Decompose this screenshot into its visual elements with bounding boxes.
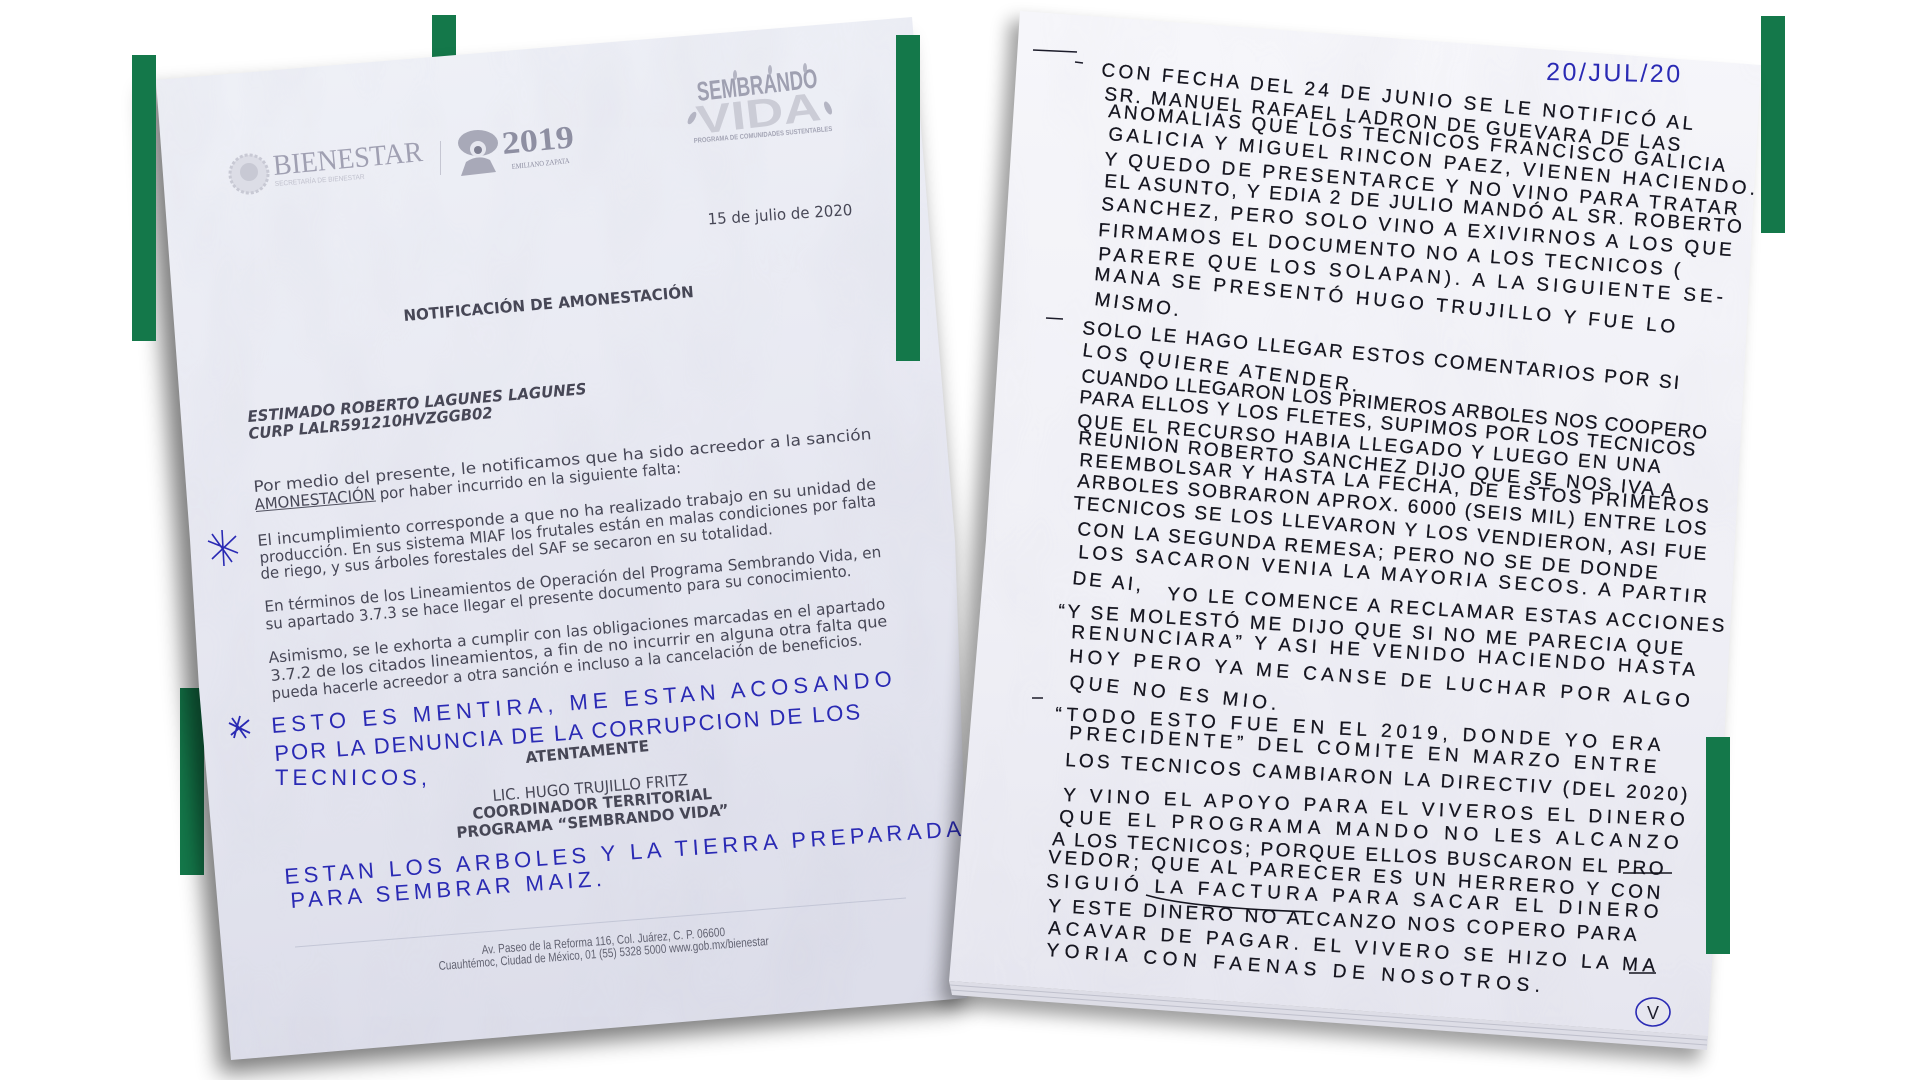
sheet paper: left	[156, 17, 967, 1060]
handwritten paragraph: notification: Y QUEDO DE PRESENTARCE Y NO VINO PARA TRATAR	[1104, 149, 1738, 220]
green bar: lower right over letter	[1706, 737, 1730, 954]
handwritten paragraph: notification: CON FECHA DEL 24 DE JUNIO SE LE NOTIFICÓ AL	[1101, 59, 1694, 135]
addressee	[247, 380, 587, 443]
handwritten paragraph: trees and money: RENUNCIARA” Y ASI HE VENIDO HACIENDO HASTA	[1071, 622, 1696, 681]
handwritten paragraph: nursery: Y VINO EL APOYO PARA EL VIVEROS EL DINERO	[1063, 785, 1685, 831]
handwritten paragraph: notification: GALICIA Y MIGUEL RINCON PAEZ, VIENEN HACIENDO.	[1108, 124, 1756, 200]
handwritten paragraph: notification: ANOMALIAS QUE LOS TECNICOS FRANCISCO GALICIA	[1108, 101, 1726, 177]
handwritten paragraph: nursery: VEDOR; QUE AL PARECER ES UN HERRERO Y CON	[1048, 847, 1661, 904]
logo: Sembrando Vida: VIDA	[694, 85, 823, 143]
handwritten paragraph: trees and money: “Y SE MOLESTÓ ME DIJO QUE SI NO ME PARECIA QUE	[1058, 600, 1684, 660]
logo: Sembrando Vida	[686, 63, 834, 145]
signature block: COORDINADOR TERRITORIAL	[472, 785, 713, 823]
signature block	[456, 737, 729, 842]
signature block: ATENTAMENTE	[525, 737, 650, 767]
text block: exhortation: Asimismo, se le exhorta a cumplir con las obligaciones marcadas en el apartado	[268, 595, 886, 667]
icon: circled initial: V	[1647, 1003, 1659, 1023]
handwritten paragraph: nursery: Y ESTE DINERO NO ALCANZO NOS COPERO PARA	[1048, 896, 1637, 946]
handwritten paragraph: notification: SANCHEZ, PERO SOLO VINO A EXIVIRNOS A LOS QUE	[1101, 194, 1732, 261]
handwritten paragraph: nursery: QUE EL PROGRAMA MANDO NO LES ALCANZO	[1059, 807, 1679, 854]
logo: Sembrando Vida: SEMBRANDO	[695, 63, 819, 107]
icon: handwritten asterisk beside offence	[208, 530, 238, 566]
handwritten note: accusation: ESTO ES MENTIRA, ME ESTAN ACOSANDO	[270, 666, 893, 738]
green bar: upper centre over left sheet	[896, 35, 920, 361]
paper texture: right	[940, 5, 1770, 1045]
date: handwritten: 20/JUL/20	[1546, 58, 1680, 88]
handwritten paragraph: trees and money: CON LA SEGUNDA REMESA; PERO NO SE DE DONDE	[1077, 519, 1659, 584]
logo: Bienestar: BIENESTAR	[272, 136, 425, 182]
text block: exhortation: 3.7.2 de los citados lineamientos, a fin de no incurrir en alguna otra falta que	[270, 612, 888, 685]
footer: address: Cuauhtémoc, Ciudad de México, 01 (55) 5328 5000 www.gob.mx/bienestar	[438, 934, 769, 973]
handwritten paragraph: trees and money: REEMBOLSAR Y HASTA LA FECHA, DE ESTOS PRIMEROS	[1079, 450, 1709, 518]
handwritten paragraph: trees and money: TECNICOS SE LOS LLEVARON Y LOS VENDIERON, ASI FUE	[1073, 493, 1707, 565]
handwritten paragraph: notification	[1093, 59, 1756, 338]
date: printed: 15 de julio de 2020	[707, 201, 853, 228]
handwritten paragraph: notification: MANA SE PRESENTÓ HUGO TRUJILLO Y FUE LO	[1094, 263, 1676, 338]
logo: Zapata 2019: EMILIANO ZAPATA	[511, 156, 570, 171]
handwritten paragraph: nursery: LOS TECNICOS CAMBIARON LA DIRECTIV (DEL 2020)	[1065, 750, 1688, 806]
handwritten paragraph: nursery: SIGUIÓ LA FACTURA PARA SACAR EL DINERO	[1046, 870, 1659, 923]
text block: guidelines: En términos de los Lineamientos de Operación del Programa Sembrando Vida, en	[264, 543, 882, 616]
text block: opening: AMONESTACIÓN por haber incurrido en la siguiente falta:	[254, 458, 682, 514]
green bar: upper left	[132, 55, 156, 341]
shadow: left sheet	[144, 40, 962, 1074]
handwritten note: trees: PARA SEMBRAR MAIZ.	[290, 866, 603, 913]
margin dashes	[1032, 50, 1083, 698]
paper texture: left	[150, 10, 980, 1070]
handwritten paragraph: notification: MISMO.	[1093, 289, 1180, 321]
text block: offence: El incumplimiento corresponde a que no ha realizado trabajo en su unidad de	[257, 475, 877, 550]
underlines	[1146, 873, 1672, 973]
handwritten paragraph: trees and money: HOY PERO YA ME CANSE DE LUCHAR POR ALGO	[1069, 646, 1691, 712]
handwritten paragraph: trees and money: DE AI,	[1071, 568, 1142, 596]
logo: Sembrando Vida: PROGRAMA DE COMUNIDADES SUSTENTABLES	[694, 126, 833, 145]
text block: offence	[257, 475, 877, 583]
handwritten paragraph: trees and money	[1058, 318, 1725, 715]
handwritten paragraph: nursery: A LOS TECNICOS; PORQUE ELLOS BUSCARON EL PRO	[1052, 829, 1664, 880]
handwritten paragraph: trees and money: ARBOLES SOBRARON APROX. 6000 (SEIS MIL) ENTRE LOS	[1077, 471, 1707, 540]
footer: address: Av. Paseo de la Reforma 116, Col. Juárez, C. P. 06600	[481, 925, 726, 957]
text block: offence: producción. En sus sistema MIAF los frutales están en malas condiciones por falta	[259, 492, 877, 567]
handwritten paragraph: nursery: ACAVAR DE PAGAR. EL VIVERO SE HIZO LA MA	[1048, 918, 1656, 977]
text block: opening: Por medio del presente, le notificamos que ha sido acreedor a la sanción	[253, 425, 872, 496]
panel: printed notification sheet	[150, 10, 980, 1070]
handwritten note: trees: ESTAN LOS ARBOLES Y LA TIERRA PREPARADA	[284, 816, 962, 889]
handwritten paragraph: trees and money: CUANDO LLEGARON LOS PRIMEROS ARBOLES NOS COOPERO	[1081, 366, 1708, 444]
logo: Zapata 2019: 2019	[500, 118, 575, 161]
handwritten paragraph: notification: SR. MANUEL RAFAEL LADRON DE GUEVARA DE LAS	[1104, 84, 1681, 156]
handwritten paragraph: notification: PARERE QUE LOS SOLAPAN). A LA SIGUIENTE SE-	[1098, 244, 1724, 308]
text block: opening	[253, 425, 872, 514]
handwritten note: accusation	[270, 666, 893, 790]
logo: Zapata 2019	[458, 118, 575, 176]
sheet paper: right	[949, 11, 1761, 1036]
footer: address	[295, 898, 906, 973]
logo: Bienestar: SECRETARÍA DE BIENESTAR	[274, 172, 365, 188]
handwritten paragraph: nursery: PRECIDENTE” DEL COMITE EN MARZO ENTRE	[1069, 723, 1657, 778]
signature block: PROGRAMA “SEMBRANDO VIDA”	[456, 801, 729, 842]
panel: handwritten letter	[940, 5, 1770, 1050]
addressee: ESTIMADO ROBERTO LAGUNES LAGUNES	[247, 380, 587, 426]
handwritten paragraph: trees and money: PARA ELLOS Y LOS FLETES, SUPIMOS POR LOS TECNICOS	[1079, 387, 1696, 461]
handwritten paragraph: trees and money: LOS QUIERE ATENDER.	[1081, 340, 1359, 397]
text block: guidelines: su apartado 3.7.3 se hace llegar el presente documento para su conocimiento.	[265, 562, 852, 633]
handwritten paragraph: nursery	[1046, 704, 1688, 997]
handwritten paragraph: notification: FIRMAMOS EL DOCUMENTO NO A LOS TECNICOS (	[1098, 220, 1681, 281]
shadow: right sheet	[940, 20, 1750, 1062]
icon: circled initial	[1636, 998, 1670, 1026]
green bar: upper right	[1761, 16, 1785, 233]
text block: exhortation	[268, 595, 888, 703]
green bar: top behind left sheet	[432, 15, 456, 75]
handwritten paragraph: trees and money: QUE EL RECURSO HABIA LLEGADO Y LUEGO EN UNA	[1077, 411, 1662, 478]
signature block: LIC. HUGO TRUJILLO FRITZ	[492, 771, 689, 805]
text block: exhortation: pueda hacerle acreedor a otra sanción e incluso a la cancelación de beneficios.	[271, 631, 863, 703]
handwritten paragraph: notification: EL ASUNTO, Y EDIA 2 DE JULIO MANDÓ AL SR. ROBERTO	[1104, 170, 1743, 238]
handwritten paragraph: trees and money: REUNION ROBERTO SANCHEZ DIJO QUE SE NOS IVA A	[1078, 428, 1675, 502]
handwritten paragraph: nursery: “TODO ESTO FUE EN EL 2019, DONDE YO ERA	[1055, 704, 1661, 756]
handwritten paragraph: nursery: YORIA CON FAENAS DE NOSOTROS.	[1046, 940, 1541, 997]
paper stack edge	[949, 981, 1708, 1050]
addressee: CURP LALR591210HVZGGB02	[248, 404, 493, 443]
handwritten paragraph: trees and money: QUE NO ES MIO.	[1068, 672, 1278, 715]
handwritten paragraph: trees and money: YO LE COMENCE A RECLAMAR ESTAS ACCIONES	[1167, 584, 1725, 637]
green bar: lower left behind sheet	[180, 688, 204, 875]
logo: Bienestar	[230, 136, 441, 193]
handwritten note: accusation: POR LA DENUNCIA DE LA CORRUPCION DE LOS	[274, 699, 861, 766]
handwritten paragraph: trees and money: SOLO LE HAGO LLEGAR ESTOS COMENTARIOS POR SI	[1082, 318, 1680, 394]
heading: notification title: NOTIFICACIÓN DE AMONESTACIÓN	[403, 282, 694, 325]
text block: offence: de riego, y sus árboles forestales del SAF se secaron en su totalidad.	[260, 520, 773, 583]
icon: handwritten asterisk beside note	[229, 716, 250, 738]
handwritten paragraph: trees and money: LOS SACARON VENIA LA MAYORIA SECOS. A PARTIR	[1078, 542, 1708, 608]
handwritten note: accusation: TECNICOS,	[275, 765, 427, 790]
